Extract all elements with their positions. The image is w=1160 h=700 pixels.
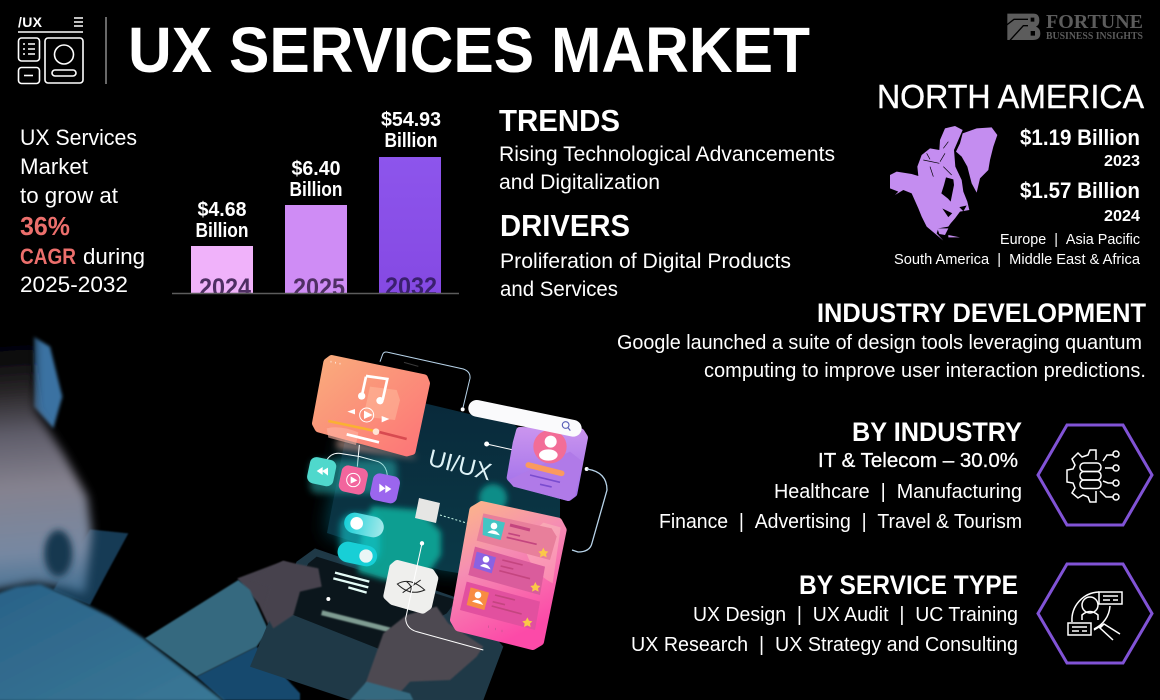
- bar 2032: Billion: [384, 130, 438, 152]
- bar 2025: [285, 158, 347, 302]
- card: eye icon: [387, 564, 434, 610]
- laptop dot: [326, 597, 330, 601]
- text block: market growth: to grow at: [20, 183, 118, 208]
- connector dots: [461, 407, 589, 471]
- woman: collar: [53, 529, 128, 605]
- text block: market growth: Market: [20, 154, 88, 179]
- heading: North America: NORTH AMERICA: [877, 78, 1144, 115]
- text block: regional values: $1.57 Billion: [1020, 178, 1140, 203]
- woman: right cuff: [350, 682, 413, 700]
- teal shape on screen: [358, 484, 507, 580]
- text block: market growth: 2025-2032: [20, 272, 128, 297]
- toggle: lower: [336, 540, 379, 568]
- text block: by industry: IT & Telecom – 30.0%: [818, 450, 1018, 472]
- text block: drivers: [500, 208, 791, 301]
- text block: regional values: 2024: [1104, 208, 1140, 225]
- laptop deck: [250, 548, 503, 700]
- search bar: [477, 408, 573, 431]
- text block: by service type: UX Research | UX Strategy and Consulting: [631, 634, 1018, 656]
- text block: industry development: Google launched a suite of design tools leveraging quantum: [617, 332, 1142, 354]
- map: Greenland: [956, 127, 997, 193]
- laptop: [250, 548, 503, 700]
- text block: drivers: DRIVERS: [500, 208, 630, 243]
- woman using laptop: [0, 320, 300, 700]
- text block: trends: and Digitalization: [499, 171, 660, 194]
- transparent screen: [327, 395, 560, 580]
- woman: left hand: [237, 561, 300, 628]
- button: rewind: [306, 456, 337, 487]
- map: Hudson Bay: [941, 177, 954, 202]
- text block: trends: TRENDS: [499, 103, 620, 138]
- label connector: [485, 442, 513, 450]
- connector: right bracket: [572, 469, 607, 552]
- bar 2025: Billion: [290, 179, 342, 201]
- icon: hexagon gear: [1038, 425, 1152, 525]
- logo: Fortune Business Insights: [1007, 11, 1143, 42]
- bar 2025: 2025: [293, 274, 345, 302]
- logo wordmark: FORTUNE: [1046, 11, 1143, 33]
- text block: industry development: INDUSTRY DEVELOPMENT: [817, 298, 1146, 328]
- bar 2024: Billion: [196, 220, 248, 242]
- icon: UX wireframe: [18, 14, 83, 84]
- connector: lower line: [406, 542, 483, 650]
- card glow: [337, 438, 417, 458]
- bar 2032: $54.93: [381, 109, 441, 131]
- text block: market growth: [20, 125, 145, 297]
- icon: UX wireframe: /UX: [18, 14, 43, 30]
- text block: industry development: [617, 298, 1146, 382]
- divider: [105, 17, 107, 84]
- card: music player: [316, 359, 426, 452]
- bar 2025: $6.40: [292, 158, 340, 180]
- text block: regional values: [894, 125, 1141, 268]
- bar 2024: $4.68: [198, 199, 246, 221]
- bar 2024: [191, 200, 253, 293]
- dashed connector: [440, 515, 470, 524]
- woman: face highlight: [33, 337, 62, 428]
- text block: regional values: 2023: [1104, 153, 1140, 170]
- woman: right hand: [365, 607, 483, 700]
- map: channels and lakes: [923, 142, 966, 217]
- text block: trends: [499, 103, 835, 194]
- card: list: [454, 505, 563, 646]
- text block: market growth: during: [83, 244, 145, 269]
- logo: Fortune Business Insights: BUSINESS INSIGHTS: [1046, 31, 1143, 42]
- text block: by service type: BY SERVICE TYPE: [799, 570, 1018, 600]
- bar 2024: 2024: [199, 274, 251, 302]
- connector: buttons: [327, 445, 387, 475]
- text block: regional values: South America | Middle East & Africa: [894, 251, 1141, 268]
- bar 2032: 2032: [385, 273, 437, 301]
- woman: sleeve: [145, 580, 268, 677]
- button: play: [338, 464, 369, 496]
- toggle glow: [340, 513, 380, 563]
- text block: by industry: Healthcare | Manufacturing: [774, 481, 1022, 503]
- lower interface: [336, 505, 563, 650]
- woman: fingers: [250, 561, 322, 628]
- text block: market growth: 36%: [20, 211, 70, 241]
- text block: drivers: and Services: [500, 278, 618, 301]
- text block: drivers: Proliferation of Digital Products: [500, 250, 791, 273]
- button glow: [310, 460, 397, 493]
- square tile: [415, 498, 440, 523]
- map: Caribbean: [937, 228, 960, 237]
- bar 2032: [379, 109, 441, 301]
- toggle: upper: [342, 511, 386, 539]
- text block: by industry: Finance | Advertising | Travel & Tourism: [659, 511, 1022, 533]
- text block: by industry: BY INDUSTRY: [852, 417, 1022, 447]
- text block: by industry: [659, 417, 1022, 533]
- logo mark: [1007, 14, 1040, 40]
- floating interface: [306, 352, 589, 505]
- card: profile: [508, 430, 584, 501]
- connector: phone outline: [380, 352, 470, 409]
- text block: by service type: [631, 570, 1018, 656]
- text block: by service type: UX Design | UX Audit | UC Training: [693, 604, 1018, 626]
- title: UX SERVICES MARKET: [128, 14, 810, 86]
- woman: sweater: [0, 584, 225, 700]
- label: UI/UX: UI/UX: [426, 445, 494, 486]
- woman: hair shadow: [44, 530, 72, 577]
- icon: hexagon user research: [1038, 564, 1152, 663]
- bar chart: market size: [172, 109, 459, 302]
- text block: trends: Rising Technological Advancements: [499, 143, 835, 166]
- map: North America: [890, 126, 997, 241]
- map: mainland and arctic: [890, 126, 969, 241]
- laptop keyboard: [282, 557, 457, 650]
- woman: lower body: [197, 647, 300, 700]
- laptop trackpad light bar: [322, 613, 390, 630]
- text block: industry development: computing to improve user interaction predictions.: [704, 360, 1146, 382]
- transparent screen glow: [327, 440, 500, 570]
- woman: hair: [0, 320, 92, 593]
- text block: regional values: Europe | Asia Pacific: [1000, 231, 1140, 248]
- text block: market growth: CAGR: [20, 244, 76, 269]
- button: forward: [369, 472, 401, 505]
- text block: regional values: $1.19 Billion: [1020, 125, 1140, 150]
- laptop white lines: [333, 573, 369, 593]
- text block: market growth: UX Services: [20, 125, 137, 150]
